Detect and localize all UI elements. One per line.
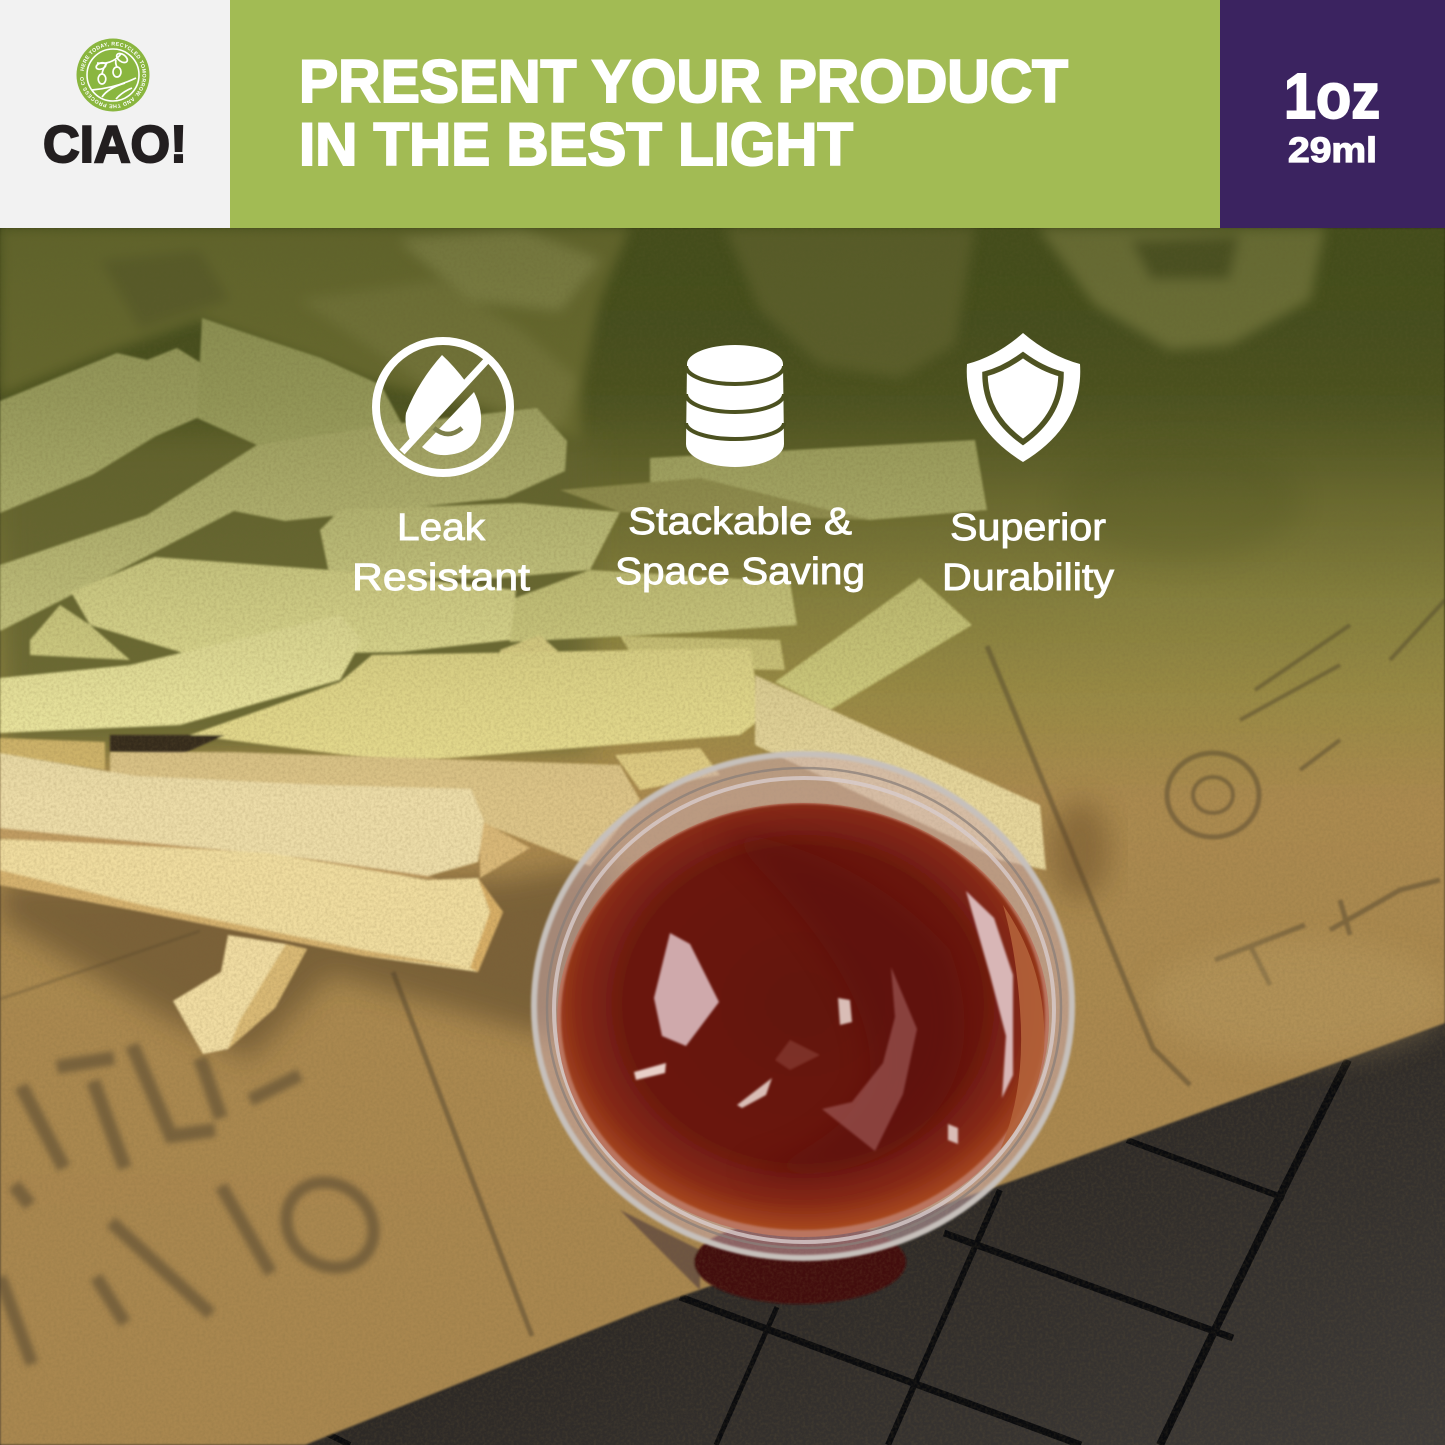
feature: durability [942, 333, 1114, 599]
label [942, 507, 1114, 599]
feature: leak resistant [352, 341, 530, 599]
size text: 29ml [1288, 131, 1377, 170]
label: Resistant [352, 557, 530, 599]
label: Space Saving [615, 551, 865, 593]
icon: no drop [376, 341, 510, 473]
ketchup dark swirl [720, 830, 965, 1175]
title text: PRESENT YOUR PRODUCT [299, 48, 1068, 115]
lower fries [0, 675, 1046, 1054]
sauce edge band [557, 803, 1049, 1237]
size text: 1oz [1284, 60, 1380, 132]
upper fries [0, 318, 987, 770]
cup base [620, 1210, 906, 1304]
paper shading [0, 860, 620, 1060]
logo wordmark: CIAO! [43, 116, 187, 174]
dark table surface [0, 800, 1445, 1445]
logo badge [76, 38, 150, 112]
icon: shield [967, 333, 1080, 462]
header: logo panel [0, 0, 230, 228]
header: size panel [1220, 0, 1445, 228]
ketchup [561, 804, 1045, 1230]
ketchup highlights [634, 891, 1013, 1151]
label: Durability [942, 557, 1114, 599]
header: title banner [230, 0, 1220, 228]
title text: IN THE BEST LIGHT [299, 111, 853, 178]
feature: stackable [615, 345, 865, 593]
title text [299, 48, 1068, 178]
ketchup orange edge [1000, 905, 1044, 1150]
label: Superior [950, 507, 1106, 549]
icon: stacked cups [686, 345, 784, 467]
label: Stackable & [628, 501, 852, 543]
olive branch [92, 52, 136, 99]
left dark background behind fries [0, 440, 590, 750]
paper print marks [0, 1045, 391, 1364]
clear plastic rim [534, 754, 1072, 1258]
fried chicken pieces [0, 228, 1325, 440]
green tint overlay [0, 228, 1445, 800]
wire cooling rack [310, 1060, 1348, 1445]
label [352, 507, 530, 599]
size text [1284, 60, 1380, 170]
sauce cup [534, 754, 1072, 1258]
label: Leak [397, 507, 486, 549]
label [615, 501, 865, 593]
